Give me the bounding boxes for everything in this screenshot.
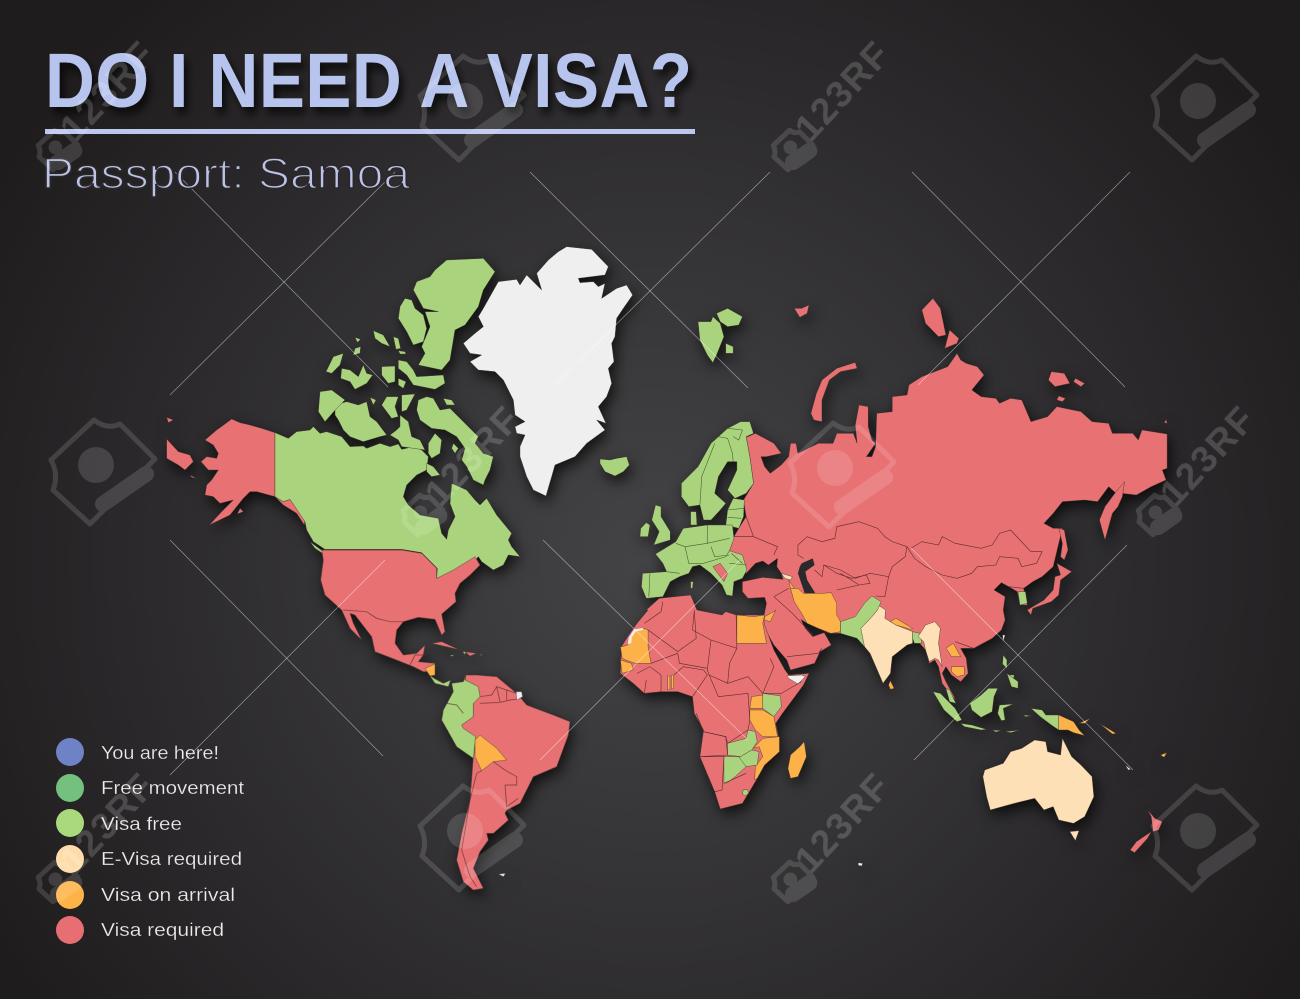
watermark icons and text: 123RF <box>52 34 162 148</box>
Greenland <box>463 247 633 496</box>
Europe visa free <box>640 422 754 598</box>
legend: visa required: Visa required <box>101 920 224 940</box>
Mozambique <box>754 737 779 780</box>
Falkland Islands <box>498 873 506 877</box>
legend <box>56 738 244 944</box>
Caribbean islands <box>432 642 484 656</box>
Uganda <box>750 695 763 708</box>
Azerbaijan strip <box>789 580 794 588</box>
Iran <box>791 588 840 633</box>
Western Sahara outline <box>628 628 643 644</box>
Madagascar <box>788 742 806 778</box>
Colombia, Ecuador, Peru <box>442 673 480 758</box>
Pakistan <box>840 596 881 647</box>
watermark icons and text: 123RF <box>52 766 162 880</box>
world map <box>167 247 1167 890</box>
legend: visa on arrival: Visa on arrival <box>101 885 235 905</box>
Tasmania <box>1070 831 1079 841</box>
region: Europe and Eurasia <box>640 298 1167 700</box>
region: North America north, Canada, Alaska, Greenland, Iceland <box>167 247 633 578</box>
Zimbabwe <box>739 750 759 767</box>
Canada <box>275 258 520 578</box>
title underline <box>45 129 695 134</box>
South Korea <box>1018 592 1027 605</box>
Caspian Sea <box>798 558 816 595</box>
legend: free movement: Free movement <box>101 778 244 798</box>
United States, Mexico and Central America <box>321 550 480 672</box>
Egypt <box>737 615 766 643</box>
Costa Rica and Panama <box>429 675 451 687</box>
legend: visa required <box>56 916 224 944</box>
title: DO I NEED A VISA? <box>45 37 692 124</box>
Taiwan <box>1003 635 1005 642</box>
diagonal watermark lines <box>170 172 1133 775</box>
Cambodia <box>951 667 964 677</box>
Balkans visa required <box>713 563 728 582</box>
Indonesia and Malaysia <box>933 688 1059 733</box>
region: Africa, South Asia, Southeast Asia, Oceania <box>620 573 1167 866</box>
Europe borders <box>649 428 747 597</box>
watermark icons and text: 123RF <box>417 399 527 513</box>
Zambia <box>728 730 757 757</box>
Australia <box>983 738 1094 823</box>
Tanzania <box>750 710 778 737</box>
Nepal <box>890 618 913 629</box>
Armenia <box>781 573 792 580</box>
legend: visa free: Visa free <box>101 814 182 834</box>
Nicaragua <box>425 664 435 676</box>
African borders <box>637 602 802 792</box>
watermark icons and text: 123RF <box>787 34 897 148</box>
legend: visa on arrival <box>56 881 235 909</box>
legend: visa free <box>56 809 182 837</box>
Africa <box>620 595 809 809</box>
Bolivia <box>475 735 507 771</box>
Somalia <box>787 675 805 684</box>
French Guiana <box>516 692 523 700</box>
legend: free movement <box>56 774 244 802</box>
South America <box>457 675 570 890</box>
legend: e-visa required <box>56 845 242 873</box>
Russia, Central Asia, China, Middle East <box>729 353 1167 700</box>
Papua New Guinea and Pacific islands <box>1059 715 1167 757</box>
Jordan <box>765 610 776 622</box>
Botswana and Namibia strip <box>724 757 746 783</box>
legend: e-visa required: E-Visa required <box>101 849 242 869</box>
Lesotho <box>742 789 749 796</box>
Bangladesh <box>913 632 922 643</box>
Laos <box>946 643 961 657</box>
Philippines <box>1003 655 1018 688</box>
Iceland <box>600 457 629 476</box>
Alaska <box>167 417 305 525</box>
Togo and Benin <box>668 675 674 690</box>
legend: you are here: You are here! <box>101 743 219 763</box>
subtitle: Passport: Samoa <box>42 150 410 198</box>
Myanmar <box>918 622 942 667</box>
India <box>857 603 913 683</box>
legend: you are here <box>56 738 219 766</box>
New Zealand <box>1130 810 1162 853</box>
watermark icons and text: 123RF <box>787 766 897 880</box>
Mauritania <box>620 628 651 663</box>
Sri Lanka <box>889 681 894 689</box>
South American borders <box>322 550 518 887</box>
Kenya <box>763 693 781 717</box>
region: Central and South America, USA <box>321 550 570 890</box>
Senegal <box>620 660 633 673</box>
Asia borders <box>731 517 1042 657</box>
Svalbard <box>698 308 742 363</box>
small white islands <box>858 765 1131 866</box>
watermark icons and text: 123RF <box>1152 399 1262 513</box>
Russian arctic islands and far east <box>794 298 1167 615</box>
